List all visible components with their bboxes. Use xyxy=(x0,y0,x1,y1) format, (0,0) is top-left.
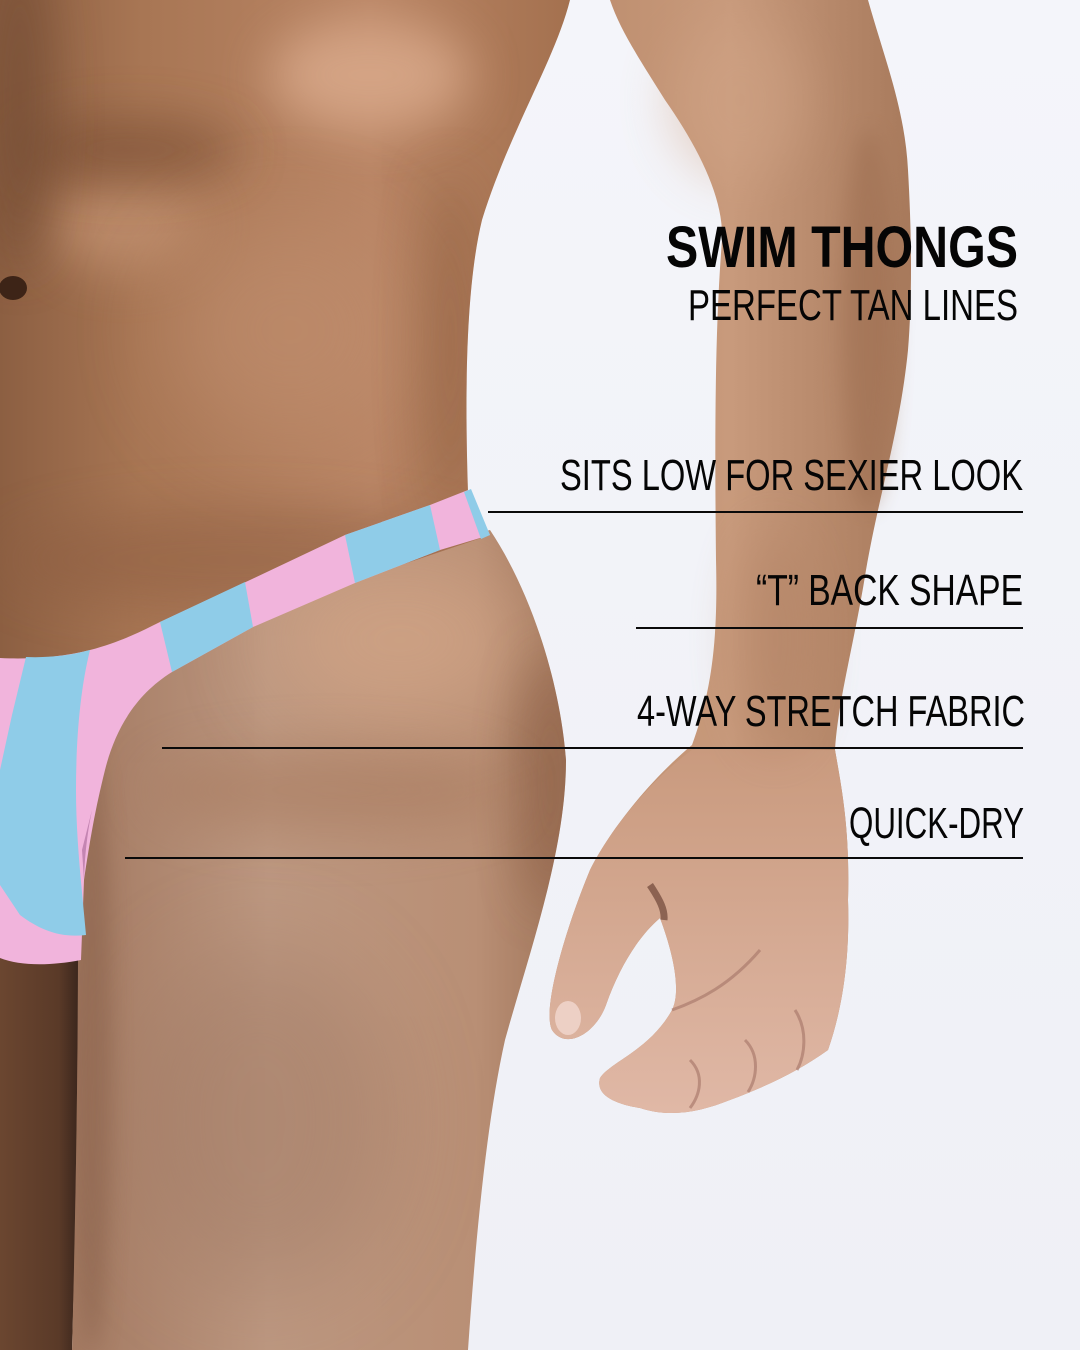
garment: pink and blue striped swim thong xyxy=(0,489,490,964)
figure: thigh xyxy=(60,520,580,1350)
title: SWIM THONGS xyxy=(666,215,1018,280)
figure: far leg xyxy=(0,950,84,1350)
figure: torso xyxy=(0,0,570,700)
figure: arm and hand xyxy=(550,0,911,1113)
icon: finger creases xyxy=(672,950,804,1108)
